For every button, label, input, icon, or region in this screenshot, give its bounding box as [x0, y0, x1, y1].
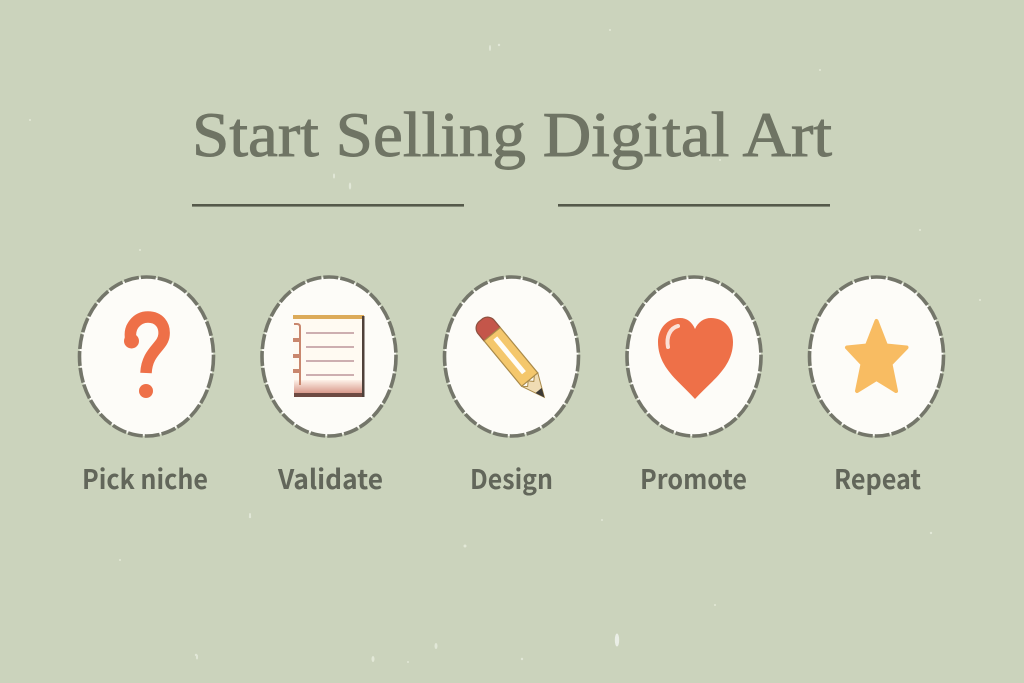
- title underline left: [192, 204, 464, 207]
- title underline right: [558, 204, 830, 207]
- label: validate: Validate: [277, 458, 383, 497]
- icon: pencil: [473, 314, 552, 404]
- label: repeat: Repeat: [834, 458, 921, 497]
- title: Start Selling Digital Art: [192, 100, 833, 170]
- label: design: Design: [470, 458, 553, 497]
- label: pick niche: Pick niche: [82, 458, 208, 497]
- step 2: validate: [262, 277, 396, 497]
- step 3: design: [444, 277, 578, 497]
- icon: question mark: [124, 317, 164, 398]
- label: promote: Promote: [640, 458, 747, 497]
- icon: star: [847, 321, 906, 391]
- step 1: pick niche: [80, 277, 214, 497]
- icon: heart: [658, 318, 733, 399]
- icon: notebook: [293, 315, 364, 397]
- step 4: promote: [627, 277, 761, 497]
- step 5: repeat: [810, 277, 944, 497]
